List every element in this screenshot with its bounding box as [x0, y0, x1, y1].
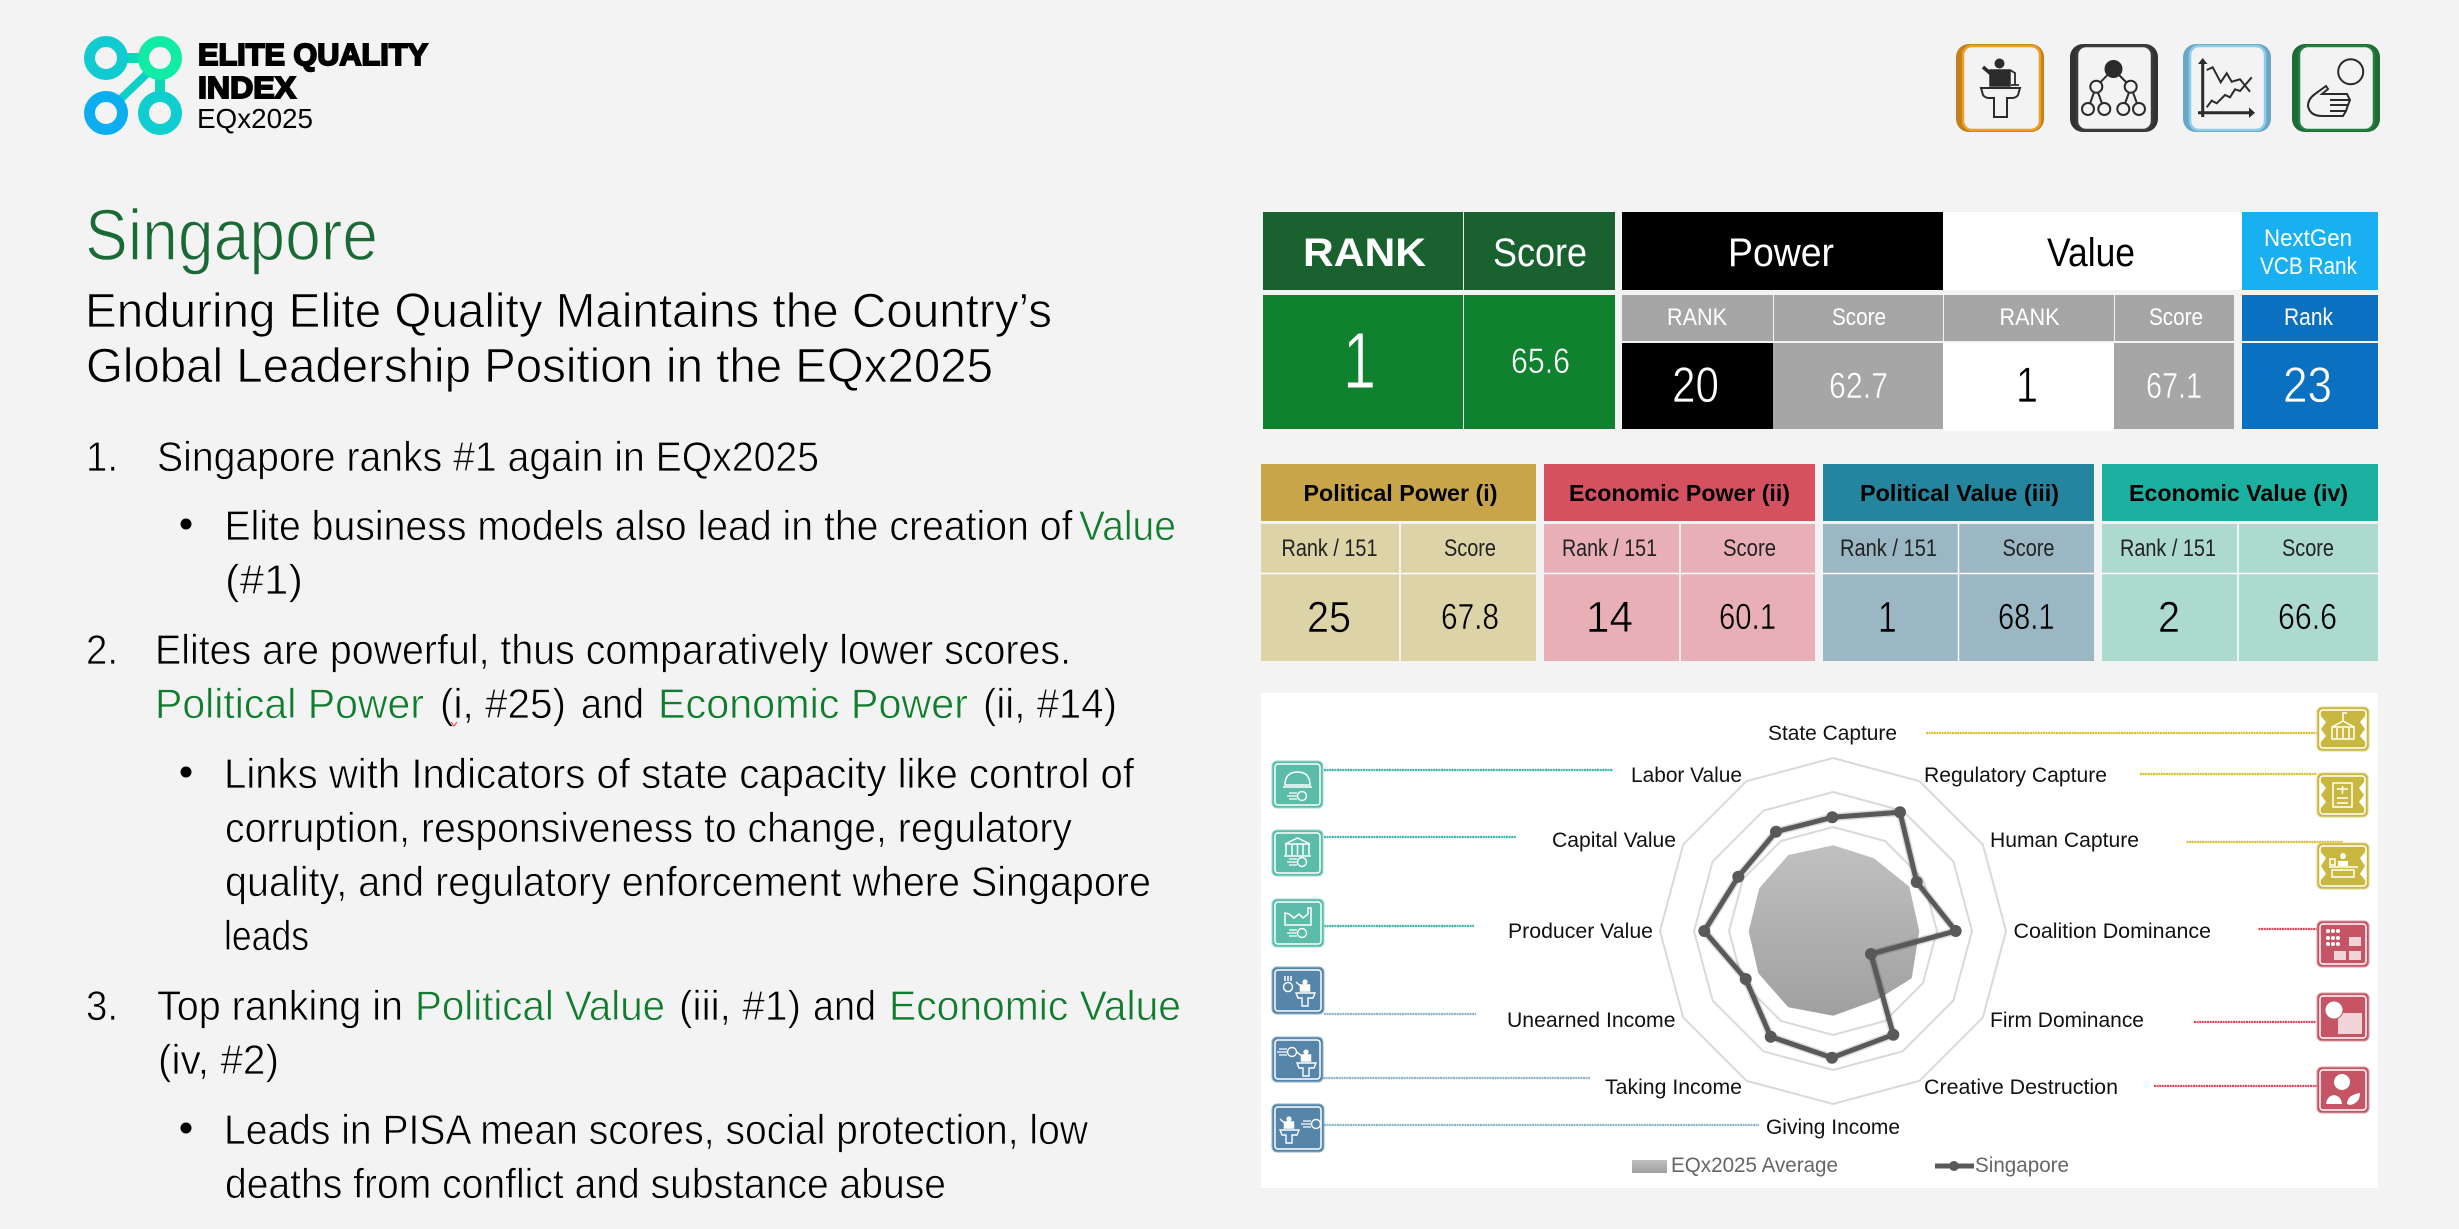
axis labels: Creative Destruction: [1924, 1076, 2118, 1099]
power block: 62.7: [1829, 365, 1888, 406]
point 3: Top ranking in: [157, 982, 403, 1029]
value block: 67.1: [2146, 365, 2202, 406]
NextGen VCB rank: 23: [2283, 357, 2332, 413]
series: Singapore: [1698, 806, 1962, 1064]
scorecard: four sub-indices: [1261, 464, 2378, 661]
overall rank and score: 1: [1343, 316, 1376, 405]
icon: state capture: [2317, 707, 2369, 751]
NextGen VCB rank: [2242, 212, 2378, 429]
title: Singapore: Singapore: [85, 196, 378, 276]
logo text: ELITE QUALITY: [198, 37, 428, 72]
overall rank and score: Score: [1493, 231, 1587, 275]
point 1: Singapore ranks #1 again in EQx2025: [157, 433, 819, 480]
icon: producer value: [1272, 899, 1324, 947]
power block: Score: [1832, 304, 1886, 331]
icon: creative destruction: [2317, 1067, 2369, 1113]
value block: [1943, 212, 2242, 431]
Political Power (i): Political Power (i): [1304, 480, 1498, 506]
point 2: Links with Indicators of state capacity like control of: [224, 750, 1134, 797]
Economic Value (iv): Score: [2282, 535, 2334, 562]
panel: radar chart: [1261, 693, 2378, 1188]
Economic Power (ii): Rank / 151: [1562, 535, 1657, 562]
point 3: Economic Value: [889, 982, 1181, 1029]
leader lines: [1323, 733, 2343, 1125]
subtitle: Global Leadership Position in the EQx2025: [86, 340, 993, 393]
Economic Power (ii): 60.1: [1719, 596, 1776, 637]
Economic Value (iv): [2102, 464, 2378, 661]
value block: RANK: [2000, 304, 2060, 331]
axis labels: Regulatory Capture: [1924, 764, 2107, 787]
icon: podium, politics: [1956, 44, 2044, 132]
icon: giving income: [1272, 1104, 1324, 1152]
icon: labor value: [1272, 761, 1323, 808]
Political Power (i): Rank / 151: [1282, 535, 1378, 562]
logo text: EQx2025: [197, 103, 313, 134]
logo text: INDEX: [198, 70, 296, 105]
Economic Power (ii): Economic Power (ii): [1569, 480, 1790, 506]
icon: hand and circle: [2292, 44, 2380, 132]
legend: Singapore: [1975, 1154, 2069, 1177]
axis labels: Capital Value: [1552, 829, 1676, 852]
overall rank and score: RANK: [1303, 231, 1426, 275]
logo text: [197, 37, 428, 134]
axis labels: Labor Value: [1631, 764, 1742, 787]
icon: firm dominance: [2317, 993, 2369, 1041]
point 2: Economic Power: [658, 680, 968, 727]
scorecard: overall rank, power, value, NextGen: [1263, 212, 2378, 431]
icon: hierarchy tree: [2070, 44, 2158, 132]
point 3: (iv, #2): [158, 1036, 279, 1083]
power block: RANK: [1667, 304, 1727, 331]
icon row: four elite categories: [1956, 44, 2380, 132]
subtitle: Enduring Elite Quality Maintains the Country’s: [85, 285, 1052, 338]
icon: human capture: [2317, 843, 2369, 889]
subtitle: [85, 285, 1052, 393]
axis labels: Giving Income: [1766, 1116, 1900, 1139]
point 3: Political Value: [415, 982, 665, 1029]
text block: key findings: [86, 433, 1181, 1207]
point 1: Elite business models also lead in the creation of: [224, 502, 1073, 549]
legend: [1632, 1154, 2069, 1177]
point 3: and: [813, 982, 876, 1029]
point 1: 1.: [86, 433, 118, 480]
axis labels: State Capture: [1768, 722, 1897, 745]
Political Power (i): 25: [1307, 593, 1351, 642]
Political Power (i): Score: [1444, 535, 1496, 562]
NextGen VCB rank: Rank: [2284, 304, 2334, 331]
point 1: [86, 433, 1176, 603]
axis labels: Firm Dominance: [1990, 1009, 2144, 1032]
series: EQx2025 average: [1749, 845, 1919, 1016]
point 2: quality, and regulatory enforcement where Singapore: [225, 858, 1151, 905]
NextGen VCB rank: VCB Rank: [2260, 253, 2358, 280]
NextGen VCB rank: NextGen: [2264, 225, 2352, 252]
icon: regulatory capture: [2317, 773, 2368, 817]
power block: Power: [1728, 231, 1834, 275]
value block: Value: [2047, 231, 2135, 275]
axis labels: Unearned Income: [1507, 1009, 1676, 1032]
axis labels: [1507, 722, 2211, 1139]
axis labels: Taking Income: [1605, 1076, 1742, 1099]
icon: unearned income: [1272, 967, 1324, 1014]
point 2: 2.: [86, 626, 118, 673]
Economic Power (ii): [1544, 464, 1815, 661]
point 1: Value: [1079, 502, 1176, 549]
Political Value (iii): 1: [1878, 593, 1897, 642]
Economic Value (iv): 2: [2158, 593, 2180, 642]
Political Value (iii): Political Value (iii): [1860, 480, 2059, 506]
value block: 1: [2016, 357, 2038, 413]
point 2: [86, 626, 1151, 959]
axis labels: Coalition Dominance: [2014, 920, 2211, 943]
Economic Value (iv): 66.6: [2278, 596, 2337, 637]
point 2: leads: [224, 912, 309, 959]
Political Power (i): 67.8: [1441, 596, 1499, 637]
Economic Value (iv): Rank / 151: [2120, 535, 2216, 562]
point 3: (iii, #1): [679, 982, 801, 1029]
Political Value (iii): Score: [2002, 535, 2054, 562]
legend: EQx2025 Average: [1671, 1154, 1838, 1177]
overall rank and score: [1263, 212, 1615, 429]
title block: [85, 196, 1052, 393]
Political Value (iii): [1823, 464, 2094, 661]
power block: 20: [1672, 357, 1719, 413]
axis labels: Producer Value: [1508, 920, 1653, 943]
Economic Power (ii): Score: [1723, 535, 1776, 562]
icon: capital value: [1272, 830, 1323, 876]
point 3: deaths from conflict and substance abuse: [225, 1160, 946, 1207]
point 1: (#1): [225, 556, 303, 603]
axis labels: Human Capture: [1990, 829, 2139, 852]
icon: line chart: [2183, 44, 2271, 132]
Political Power (i): [1261, 464, 1536, 661]
value block: Score: [2149, 304, 2203, 331]
icon: network logo mark: [90, 42, 176, 130]
point 2: Political Power: [155, 680, 424, 727]
overall rank and score: 65.6: [1511, 342, 1570, 381]
point 2: (i, #25): [440, 680, 566, 727]
icon: taking income: [1272, 1037, 1323, 1082]
Political Value (iii): 68.1: [1998, 596, 2054, 637]
Political Value (iii): Rank / 151: [1840, 535, 1937, 562]
point 3: [86, 982, 1181, 1207]
point 2: corruption, responsiveness to change, regulatory: [225, 804, 1072, 851]
point 3: Leads in PISA mean scores, social protection, low: [224, 1106, 1089, 1153]
Economic Power (ii): 14: [1586, 593, 1633, 642]
logo: Elite Quality Index: [90, 37, 428, 134]
Economic Value (iv): Economic Value (iv): [2129, 480, 2348, 506]
point 3: 3.: [86, 982, 118, 1029]
point 2: and: [581, 680, 644, 727]
radar grid: [1660, 758, 2006, 1104]
point 2: (ii, #14): [983, 680, 1117, 727]
icon: coalition dominance: [2317, 921, 2369, 967]
point 2: Elites are powerful, thus comparatively lower scores.: [155, 626, 1071, 673]
power block: [1622, 212, 1943, 429]
